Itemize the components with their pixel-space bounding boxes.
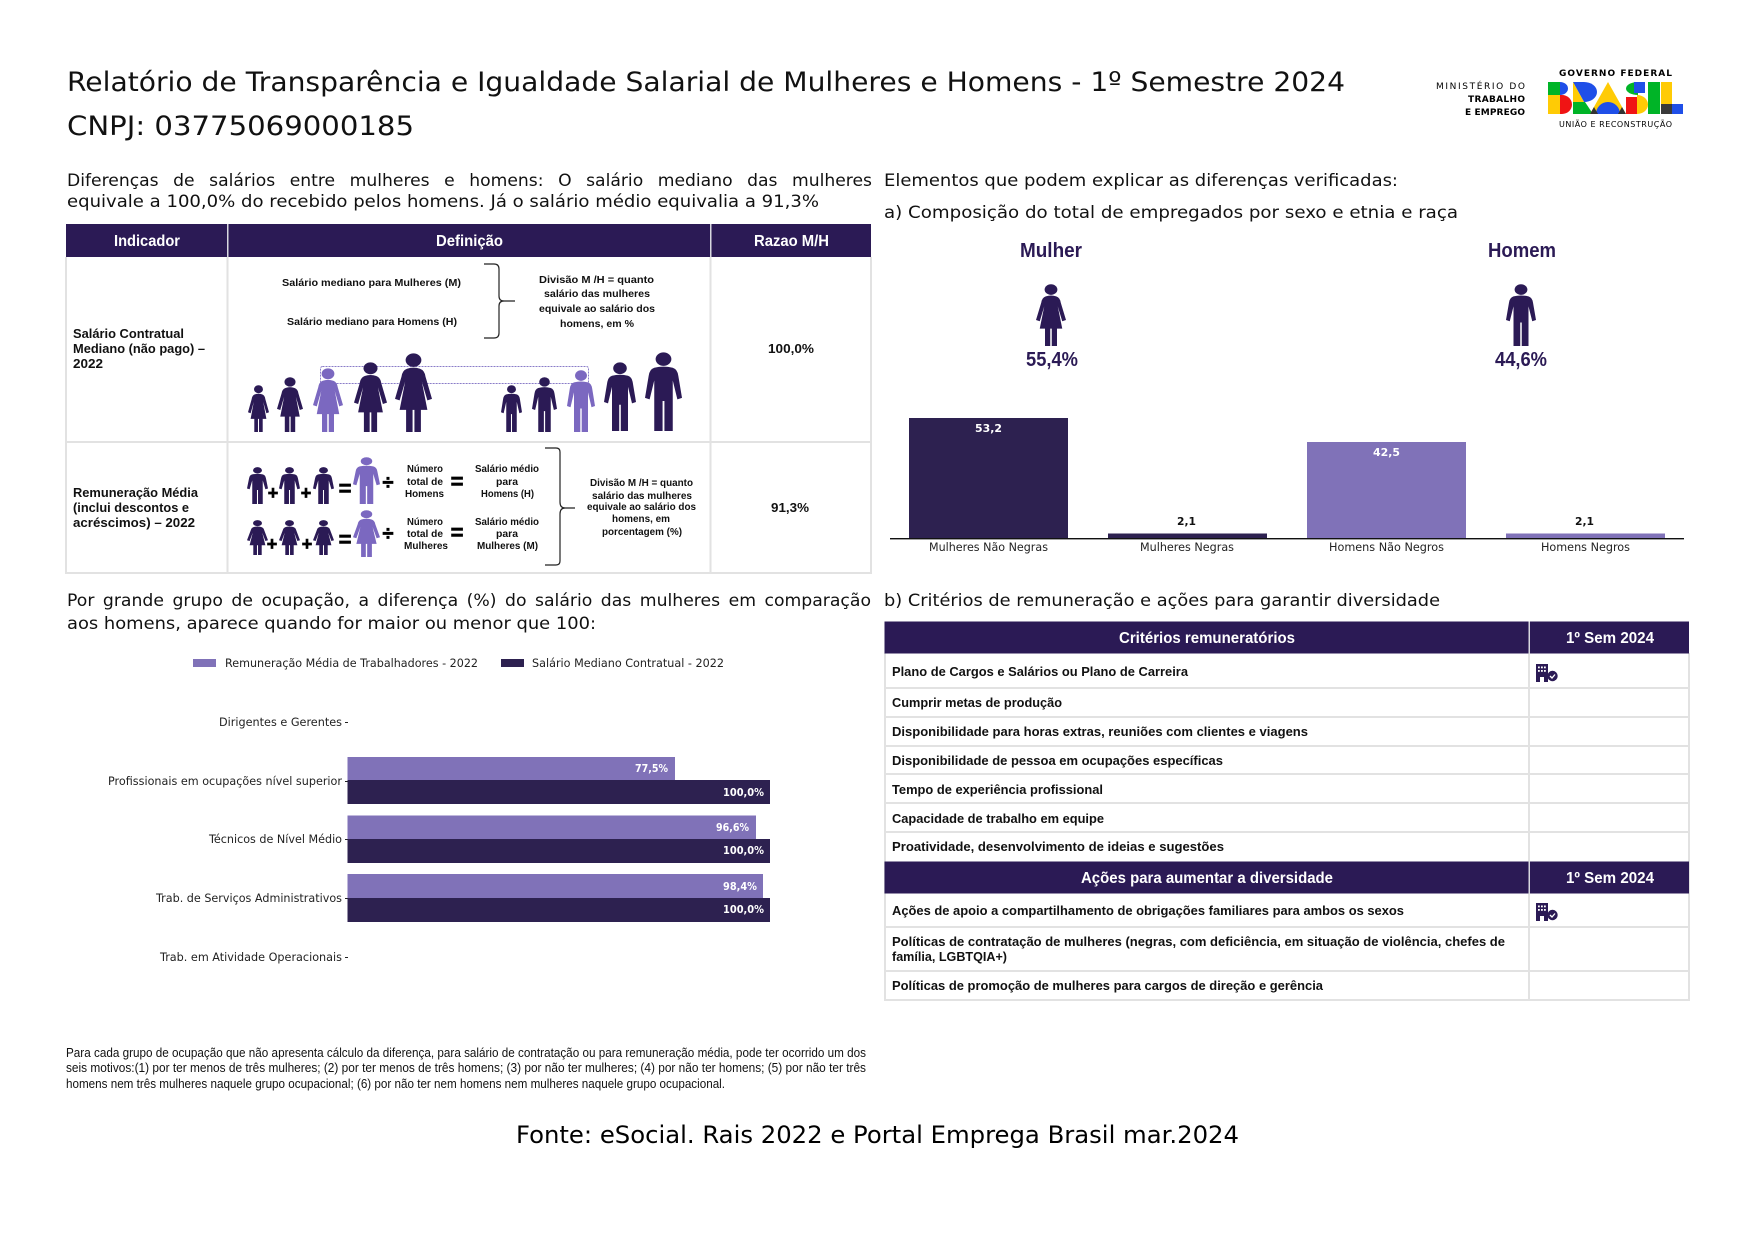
bars: profissionais: 100,0% xyxy=(723,787,764,799)
footnote: homens nem três mulheres naquele grupo ocupacional; (6) por não ter nem homens nem mulheres naquele grupo ocupacional. xyxy=(66,1077,725,1091)
logo: ministério do trabalho e emprego: E EMPREGO xyxy=(1465,108,1525,118)
legend: Remuneração Média de Trabalhadores - 2022 xyxy=(225,656,478,670)
heading: critérios: b) Critérios de remuneração e ações para garantir diversidade xyxy=(884,591,1440,611)
text block: diferenças de salários xyxy=(67,171,872,212)
row label: salário contratual: Mediano (não pago) – xyxy=(73,342,205,356)
panel: homem: 44,6% xyxy=(1495,349,1547,371)
formula: remuneração média homens: total de xyxy=(407,476,443,488)
category labels: Profissionais em ocupações nível superior xyxy=(108,774,342,788)
bars: profissionais: 77,5% xyxy=(635,763,668,775)
bar: homens não negros: 42,5 xyxy=(1373,447,1400,459)
value: 91,3%: 91,3% xyxy=(771,501,809,515)
actions rows: Políticas de contratação de mulheres (negras, com deficiência, em situação de violência, chefes de xyxy=(892,935,1505,949)
formula: remuneração média mulheres: Salário médio xyxy=(475,516,539,528)
criteria rows: Capacidade de trabalho em equipe xyxy=(892,812,1104,826)
formula: remuneração média mulheres: + xyxy=(267,534,277,554)
logo: ministério do trabalho e emprego: TRABALHO xyxy=(1468,95,1525,105)
actions rows xyxy=(892,904,1505,993)
bars: profissionais xyxy=(348,757,770,804)
category labels: Trab. de Serviços Administrativos xyxy=(155,891,342,905)
footnote: seis motivos:(1) por ter menos de três mulheres; (2) por ter menos de três homens; (3) por não ter mulheres; (4) por não ter homens; (5) por não ter três xyxy=(66,1061,866,1075)
formula: remuneração média mulheres: Mulheres (M) xyxy=(477,540,538,552)
illustration: median people row xyxy=(248,352,682,432)
definition: salário mediano: salário das mulheres xyxy=(544,288,650,300)
criteria rows: Disponibilidade de pessoa em ocupações específicas xyxy=(892,754,1223,768)
panel: homem xyxy=(1488,240,1556,371)
row label: salário contratual: 2022 xyxy=(73,357,103,371)
criteria rows: Plano de Cargos e Salários ou Plano de Carreira xyxy=(892,665,1189,679)
brace and division note: salário das mulheres xyxy=(592,490,692,502)
row label: remuneração média: acréscimos) – 2022 xyxy=(73,516,195,530)
bar: mulheres negras: Mulheres Negras xyxy=(1140,540,1234,554)
footnote xyxy=(66,1046,866,1091)
logo: governo federal brasil xyxy=(1548,69,1683,129)
logo: governo federal brasil: UNIÃO E RECONSTRUÇÃO xyxy=(1559,119,1672,129)
formula: remuneração média homens xyxy=(247,457,539,504)
table header: Indicador xyxy=(114,233,180,250)
header: ações para diversidade xyxy=(884,862,1689,894)
row label: remuneração média: Remuneração Média xyxy=(73,486,199,500)
panel: mulher: 55,4% xyxy=(1026,349,1078,371)
definition: salário mediano: Salário mediano para Homens (H) xyxy=(287,316,457,328)
bar: mulheres não negras xyxy=(909,418,1068,554)
title xyxy=(67,67,1345,142)
definition: salário mediano xyxy=(282,264,655,338)
formula: remuneração média mulheres: = xyxy=(451,520,463,545)
definition: salário mediano: equivale ao salário dos xyxy=(539,303,655,315)
chart: occupation horizontal bars xyxy=(108,656,770,964)
formula: remuneração média homens: Número xyxy=(407,463,443,475)
criteria rows: Cumprir metas de produção xyxy=(892,696,1062,710)
actions rows: Políticas de promoção de mulheres para cargos de direção e gerência xyxy=(892,979,1324,993)
bar: mulheres não negras: 53,2 xyxy=(975,423,1002,435)
formula: remuneração média homens: Homens xyxy=(405,488,444,500)
formula: remuneração média homens: ÷ xyxy=(383,472,394,494)
brace and division note xyxy=(545,448,696,565)
category labels: Trab. em Atividade Operacionais xyxy=(159,950,342,964)
formula: remuneração média mulheres: = xyxy=(339,527,351,552)
header: ações para diversidade: Ações para aumentar a diversidade xyxy=(1081,870,1333,887)
criteria rows: Tempo de experiência profissional xyxy=(892,783,1103,797)
formula: remuneração média homens: = xyxy=(451,469,463,494)
formula: remuneração média mulheres: + xyxy=(302,534,312,554)
definition: salário mediano: homens, em % xyxy=(560,318,635,330)
brace and division note: Divisão M /H = quanto xyxy=(590,477,693,489)
text block: elementos: Elementos que podem explicar as diferenças verificadas: xyxy=(884,171,1398,191)
brace and division note: homens, em xyxy=(612,513,670,525)
row label: remuneração média: (inclui descontos e xyxy=(73,501,189,515)
logo: governo federal brasil: GOVERNO FEDERAL xyxy=(1559,69,1672,79)
category labels: Dirigentes e Gerentes xyxy=(219,715,342,729)
formula: remuneração média homens: Salário médio xyxy=(475,463,539,475)
panel: homem: Homem xyxy=(1488,240,1556,262)
criteria rows xyxy=(892,665,1308,854)
text block: diferenças de salários: Diferenças de salários entre mulheres e homens: O salário mediano das mulheres xyxy=(67,171,872,191)
table header xyxy=(66,224,871,257)
bar: homens negros: Homens Negros xyxy=(1541,540,1630,554)
panel: mulher xyxy=(1020,240,1082,371)
criteria rows: Disponibilidade para horas extras, reuniões com clientes e viagens xyxy=(892,725,1308,739)
formula: remuneração média mulheres: para xyxy=(496,528,518,540)
heading: composição: a) Composição do total de empregados por sexo e etnia e raça xyxy=(884,203,1458,223)
bar: homens negros: 2,1 xyxy=(1575,515,1594,528)
legend xyxy=(193,656,724,670)
row label: salário contratual xyxy=(73,327,205,371)
panel: indicator table xyxy=(65,224,872,574)
text block: grupo de ocupação: Por grande grupo de ocupação, a diferença (%) do salário das mulheres em comparação xyxy=(67,591,871,611)
formula: remuneração média mulheres: Mulheres xyxy=(404,540,448,552)
header: critérios remuneratórios: 1º Sem 2024 xyxy=(1566,630,1654,647)
bars: serviços administrativos: 98,4% xyxy=(723,881,757,893)
formula: remuneração média homens: + xyxy=(268,483,278,503)
source line: Fonte: eSocial. Rais 2022 e Portal Emprega Brasil mar.2024 xyxy=(516,1121,1239,1149)
formula: remuneração média homens: + xyxy=(301,483,311,503)
brace and division note: equivale ao salário dos xyxy=(587,501,696,513)
formula: remuneração média homens: para xyxy=(496,476,518,488)
icon: woman xyxy=(1036,284,1066,346)
formula: remuneração média homens: Homens (H) xyxy=(481,488,534,500)
definition: salário mediano: Divisão M /H = quanto xyxy=(539,274,654,286)
brace and division note: porcentagem (%) xyxy=(602,526,682,538)
bars: técnicos: 96,6% xyxy=(716,822,749,834)
formula: remuneração média homens: = xyxy=(339,476,351,501)
logo: ministério do trabalho e emprego xyxy=(1436,80,1525,118)
row label: salário contratual: Salário Contratual xyxy=(73,327,184,341)
bars: serviços administrativos: 100,0% xyxy=(723,904,764,916)
text block: grupo de ocupação: aos homens, aparece quando for maior ou menor que 100: xyxy=(67,614,596,634)
formula: remuneração média mulheres: ÷ xyxy=(383,523,394,545)
criteria rows: Proatividade, desenvolvimento de ideias e sugestões xyxy=(892,840,1224,854)
text block: diferenças de salários: equivale a 100,0% do recebido pelos homens. Já o salário médio equivalia a 91,3% xyxy=(67,192,819,212)
formula: remuneração média mulheres: Número xyxy=(407,516,443,528)
header: critérios remuneratórios: Critérios remuneratórios xyxy=(1119,630,1295,647)
definition: salário mediano: Salário mediano para Mulheres (M) xyxy=(282,277,461,289)
legend: Salário Mediano Contratual - 2022 xyxy=(532,656,724,670)
header: ações para diversidade: 1º Sem 2024 xyxy=(1566,870,1654,887)
title: Relatório de Transparência e Igualdade Salarial de Mulheres e Homens - 1º Semestre 2024 xyxy=(67,67,1345,98)
bars: técnicos xyxy=(348,816,770,863)
icon: company check xyxy=(1536,664,1558,682)
bars: técnicos: 100,0% xyxy=(723,845,764,857)
formula: remuneração média mulheres xyxy=(247,510,539,557)
bar: mulheres não negras: Mulheres Não Negras xyxy=(929,540,1048,554)
chart: composition bars xyxy=(890,418,1684,554)
logo: ministério do trabalho e emprego: MINISTÉRIO DO xyxy=(1436,80,1525,92)
bar: mulheres negras: 2,1 xyxy=(1177,515,1196,528)
panel: criteria table xyxy=(884,622,1690,1001)
bar: homens não negros: Homens Não Negros xyxy=(1329,540,1444,554)
bar: mulheres negras xyxy=(1108,515,1267,554)
category labels xyxy=(108,715,348,964)
category labels: Técnicos de Nível Médio xyxy=(208,832,342,846)
actions rows: família, LGBTQIA+) xyxy=(892,950,1007,964)
icon: company check xyxy=(1536,903,1558,921)
actions rows: Ações de apoio a compartilhamento de obrigações familiares para ambos os sexos xyxy=(892,904,1404,918)
footnote: Para cada grupo de ocupação que não apresenta cálculo da diferença, para salário de contratação ou para remuneração média, pode ter ocorrido um dos xyxy=(66,1046,866,1060)
formula: remuneração média mulheres: total de xyxy=(407,528,443,540)
panel: mulher: Mulher xyxy=(1020,240,1082,262)
title: CNPJ: 03775069000185 xyxy=(67,111,414,142)
table header: Razao M/H xyxy=(754,233,829,250)
text block: grupo de ocupação xyxy=(67,591,871,634)
header: critérios remuneratórios xyxy=(884,622,1689,654)
bars: serviços administrativos xyxy=(348,874,770,922)
table header: Definição xyxy=(436,233,503,250)
icon: man xyxy=(1506,284,1536,346)
bar: homens não negros xyxy=(1307,442,1466,554)
value: 100,0%: 100,0% xyxy=(768,342,814,356)
row label: remuneração média xyxy=(73,486,199,530)
bar: homens negros xyxy=(1506,515,1665,554)
